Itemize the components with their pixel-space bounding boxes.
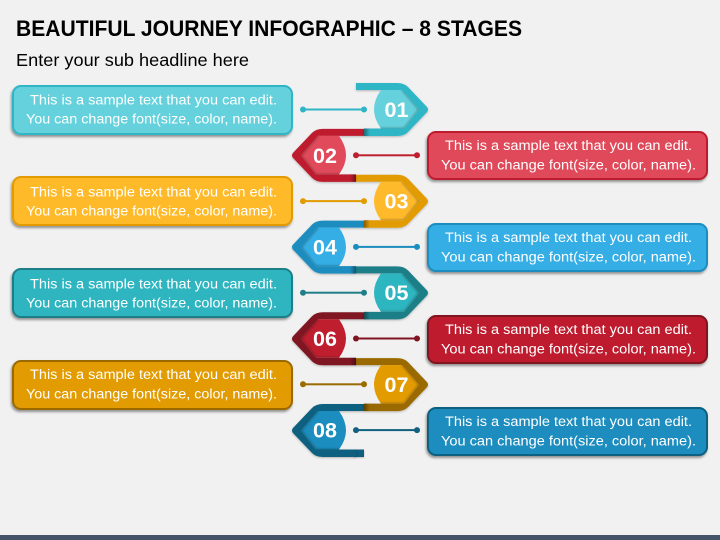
connector 08 (353, 427, 420, 433)
number 02: 02 (313, 144, 337, 168)
stage 04 text box (428, 224, 707, 271)
stage 06 arrow (292, 312, 364, 365)
connector 02 (353, 152, 420, 158)
stage 05 text box: This is a sample text that you can edit. (30, 276, 277, 292)
connector 05 (300, 290, 367, 296)
connector 01 (300, 106, 367, 112)
stage 06 text box (428, 316, 707, 363)
stage 01 text box: You can change font(size, color, name). (26, 112, 277, 128)
stage 01 arrow (356, 83, 428, 136)
stage 02 text box (428, 132, 707, 179)
stage 04 arrow (292, 221, 364, 274)
number 04: 04 (313, 235, 337, 259)
title: BEAUTIFUL JOURNEY INFOGRAPHIC – 8 STAGES (16, 16, 522, 41)
stage 08 arrow (292, 404, 364, 457)
stage 03 text box: This is a sample text that you can edit. (30, 184, 277, 200)
stage 07 text box (13, 361, 292, 409)
stage 02 text box: This is a sample text that you can edit. (445, 138, 692, 154)
stage 05 text box: You can change font(size, color, name). (26, 296, 277, 312)
connector 04 (353, 244, 420, 250)
stage 07 arrow (356, 358, 428, 411)
stage 04 text box: You can change font(size, color, name). (441, 250, 696, 266)
footer bar (0, 535, 720, 540)
stage 06 text box: This is a sample text that you can edit. (445, 322, 692, 338)
number 06: 06 (313, 327, 337, 351)
connector 03 (300, 198, 367, 204)
stage 08 text box: This is a sample text that you can edit. (445, 414, 692, 430)
number 01: 01 (385, 98, 408, 122)
stage 06 text box: You can change font(size, color, name). (441, 342, 696, 358)
stage 07 text box: This is a sample text that you can edit. (30, 367, 277, 383)
stage 01 text box (13, 86, 292, 134)
stage 04 text box: This is a sample text that you can edit. (445, 230, 692, 246)
stage 03 text box: You can change font(size, color, name). (26, 204, 277, 220)
number 07: 07 (385, 373, 408, 397)
stage 02 text box: You can change font(size, color, name). (441, 158, 696, 174)
stage 08 text box: You can change font(size, color, name). (441, 434, 696, 450)
subtitle: Enter your sub headline here (16, 50, 249, 70)
connector 06 (353, 336, 420, 342)
stage 01 text box: This is a sample text that you can edit. (30, 92, 277, 108)
number 08: 08 (313, 419, 337, 443)
stage 02 arrow (292, 129, 364, 182)
stage 08 text box (428, 408, 707, 455)
stage 07 text box: You can change font(size, color, name). (26, 386, 277, 402)
stage 03 arrow (356, 175, 428, 228)
stage 05 text box (13, 269, 292, 317)
number 05: 05 (385, 281, 408, 305)
stage 03 text box (13, 177, 292, 225)
number 03: 03 (385, 190, 408, 214)
stage 05 arrow (356, 266, 428, 319)
connector 07 (300, 381, 367, 387)
